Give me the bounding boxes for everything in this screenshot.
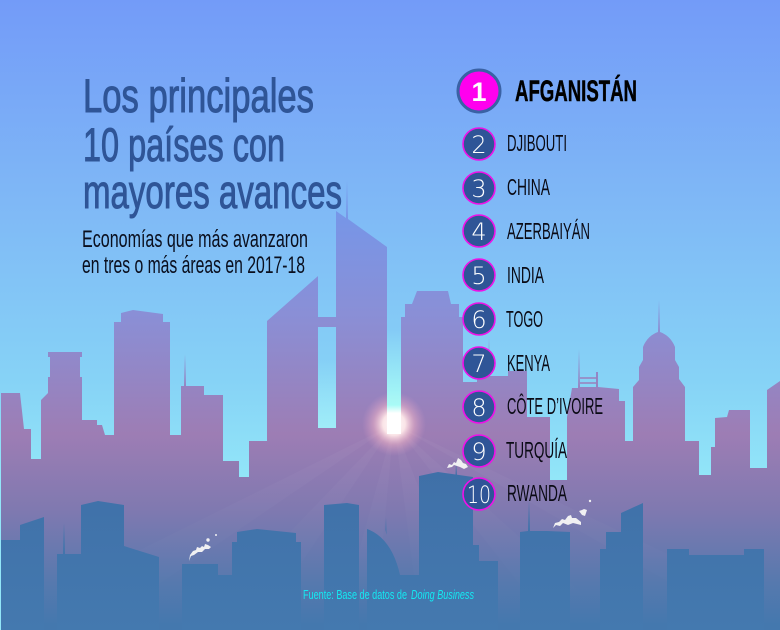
rank 9: Turquía: [463, 435, 567, 467]
window glow: [318, 360, 336, 428]
rank 7: Kenya: [463, 347, 550, 379]
rank 2: Djibouti: [463, 128, 567, 160]
subtitle: Economías que más avanzaron: [82, 226, 308, 253]
rank 1: Afganistán: [458, 70, 637, 112]
rank 2: Djibouti: DJIBOUTI: [507, 130, 567, 156]
rank 10: Rwanda: [463, 478, 567, 510]
rank 8: Côte d'Ivoire: [463, 391, 603, 423]
title: [83, 69, 342, 218]
rank 9: Turquía: TURQUÍA: [506, 437, 567, 463]
rank 7: Kenya: KENYA: [507, 350, 550, 376]
subtitle: [82, 226, 308, 279]
back skyline: [1, 180, 780, 630]
rank 1: Afganistán: AFGANISTÁN: [515, 74, 637, 108]
rank 5: India: INDIA: [507, 262, 544, 288]
light rays: [120, 424, 700, 620]
subtitle: en tres o más áreas en 2017-18: [82, 252, 305, 279]
title: mayores avances: [83, 165, 342, 218]
rank 6: Togo: 6: [471, 306, 487, 334]
rank 3: China: 3: [471, 175, 487, 203]
title: Los principales: [83, 69, 314, 122]
rank 10: Rwanda: 10: [467, 481, 491, 509]
rank 5: India: [463, 259, 544, 291]
rank 8: Côte d'Ivoire: 8: [471, 394, 487, 422]
rank 10: Rwanda: RWANDA: [507, 480, 567, 506]
rank 4: Azerbaiyán: 4: [471, 218, 487, 246]
rank 6: Togo: TOGO: [506, 306, 543, 332]
rank 4: Azerbaiyán: [463, 215, 590, 247]
rank 2: Djibouti: 2: [471, 131, 487, 159]
rank 4: Azerbaiyán: AZERBAIYÁN: [507, 218, 590, 244]
title: 10 países con: [83, 118, 285, 171]
rank 9: Turquía: 9: [471, 438, 487, 466]
rank 1: Afganistán: 1: [471, 77, 487, 107]
rank 8: Côte d'Ivoire: CÔTE D’IVOIRE: [507, 392, 603, 419]
rank 6: Togo: [463, 303, 543, 335]
rank 7: Kenya: 7: [471, 350, 487, 378]
sun: [362, 330, 426, 456]
ranking list: [458, 70, 637, 510]
clouds: [189, 458, 591, 561]
rank 3: China: [463, 172, 550, 204]
source note: Doing Business: [411, 587, 474, 602]
rank 3: China: CHINA: [507, 174, 550, 200]
front skyline: [1, 462, 764, 630]
source note: Fuente: Base de datos de: [303, 587, 407, 602]
rank 5: India: 5: [471, 262, 487, 290]
